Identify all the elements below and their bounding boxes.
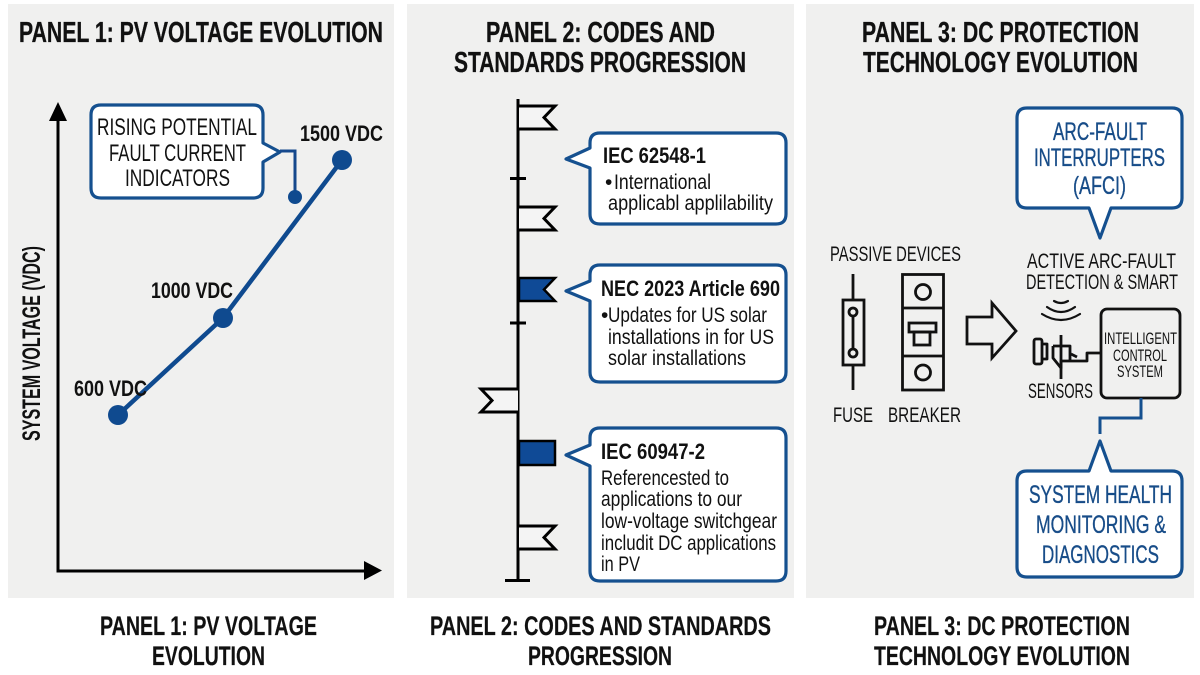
callout: NEC 2023 Article 690: NEC 2023 Article 690 — [601, 276, 780, 301]
panel: PV voltage evolution — [8, 4, 394, 598]
connector: control system to monitoring — [1100, 398, 1141, 434]
heading: panel 3 title — [862, 17, 1139, 79]
caption: panel 1 — [100, 611, 317, 671]
data label: 1500 VDC: 1500 VDC — [300, 121, 383, 146]
callout: IEC 62548-1: applicabl applilability — [608, 192, 773, 215]
y axis label: SYSTEM VOLTAGE (VDC) — [18, 246, 46, 441]
callout: arc-fault interrupters: (AFCI) — [1073, 172, 1126, 200]
caption: panel 1: EVOLUTION — [152, 641, 265, 671]
callout: rising potential fault current: INDICATORS — [125, 165, 230, 192]
callout: IEC 62548-1: • — [605, 171, 612, 194]
caption: panel 2: PROGRESSION — [528, 641, 672, 671]
icon: fuse — [843, 274, 864, 390]
label: breaker: BREAKER — [888, 404, 961, 427]
icon: signal waves — [1042, 301, 1080, 320]
caption: panel 1: PANEL 1: PV VOLTAGE — [100, 611, 317, 641]
label: fuse: FUSE — [833, 404, 873, 427]
icon: breaker — [902, 274, 944, 390]
callout: NEC 2023 Article 690: Updates for US solar — [608, 304, 767, 327]
callout: rising potential fault current: FAULT CURRENT — [109, 140, 246, 167]
heading: panel 2 title: PANEL 2: CODES AND — [486, 17, 715, 49]
box: intelligent control system — [1101, 309, 1180, 398]
heading: panel 2 title: STANDARDS PROGRESSION — [454, 47, 746, 79]
callout: system health monitoring — [1017, 441, 1182, 577]
callout: arc-fault interrupters — [1017, 108, 1182, 238]
callout: IEC 60947-2: includit DC applications — [601, 532, 776, 555]
callout: NEC 2023 Article 690: • — [601, 304, 608, 327]
label: sensors: SENSORS — [1028, 380, 1093, 403]
callout: IEC 60947-2: Referencested to — [601, 467, 729, 490]
label: active arc-fault detection — [1026, 250, 1178, 294]
data label: 600 VDC: 600 VDC — [74, 376, 147, 401]
callout: IEC 62548-1 — [566, 133, 786, 224]
callout: IEC 60947-2: IEC 60947-2 — [601, 439, 705, 464]
callout: IEC 60947-2: applications to our — [601, 488, 742, 511]
callout: NEC 2023 Article 690: solar installations — [608, 347, 746, 370]
heading: panel 2 title — [454, 17, 746, 79]
data label: 1000 VDC: 1000 VDC — [151, 278, 233, 303]
caption: panel 2 — [430, 611, 771, 671]
callout: IEC 62548-1: International — [614, 171, 711, 194]
callout: NEC 2023 Article 690: installations in for US — [608, 326, 774, 349]
callout: IEC 60947-2 — [566, 428, 786, 581]
chart axes — [49, 102, 382, 580]
caption: panel 3 — [874, 611, 1130, 671]
callout: IEC 62548-1: IEC 62548-1 — [603, 143, 706, 168]
callout: NEC 2023 Article 690 — [566, 265, 786, 382]
heading: panel 1 title: PANEL 1: PV VOLTAGE EVOLUTION — [19, 17, 383, 49]
panel: DC protection technology evolution — [806, 4, 1194, 598]
callout: arc-fault interrupters: ARC-FAULT — [1053, 118, 1147, 146]
panel: codes and standards progression — [407, 4, 794, 598]
timeline pole with flags — [481, 99, 555, 580]
callout: IEC 60947-2: in PV — [601, 553, 640, 576]
callout: rising potential fault current — [91, 105, 302, 204]
callout: IEC 60947-2: low-voltage switchgear — [601, 510, 777, 533]
caption: panel 2: PANEL 2: CODES AND STANDARDS — [430, 611, 771, 641]
arrow: passive to active — [967, 303, 1016, 358]
callout: rising potential fault current: RISING POTENTIAL — [97, 114, 257, 141]
box: intelligent control system: CONTROL — [1113, 346, 1167, 365]
icon: sensors — [1034, 335, 1100, 379]
label: passive devices: PASSIVE DEVICES — [830, 243, 961, 266]
line chart: voltage rise — [108, 150, 352, 425]
box: intelligent control system: SYSTEM — [1117, 362, 1163, 381]
